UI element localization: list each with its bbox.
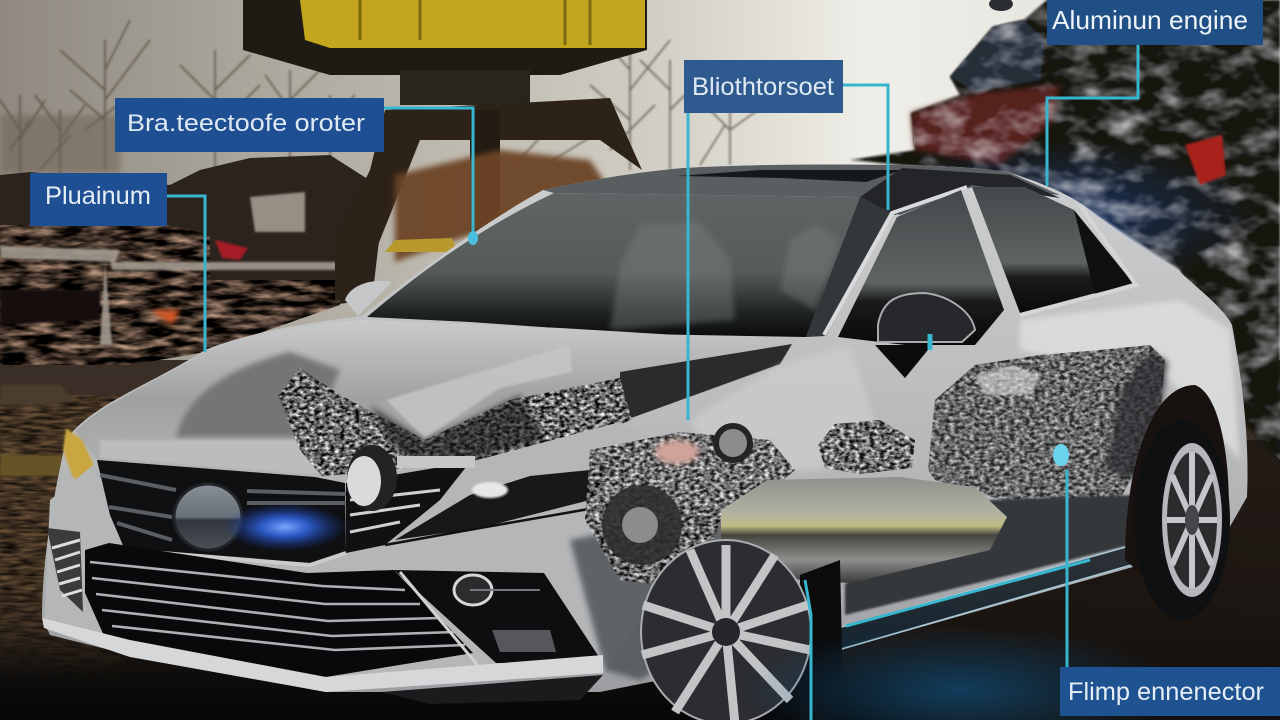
- car: rear window frame: [1020, 205, 1136, 315]
- car: upper grille: [97, 460, 346, 565]
- label: centre top: [684, 60, 843, 113]
- background: dense tree line: [0, 115, 120, 173]
- connector: under car: [805, 580, 811, 720]
- car: fog lamp recess: [394, 570, 603, 668]
- car: rear side window: [972, 187, 1133, 313]
- connector lines: [165, 45, 1138, 720]
- car: rear quarter glass: [1074, 210, 1133, 294]
- car: front side window: [838, 190, 1004, 345]
- background: dirt texture: [0, 395, 120, 665]
- car: lower grille: [85, 543, 473, 677]
- car: bumper lip highlights: [42, 618, 603, 692]
- background: dirt mound: [0, 385, 75, 406]
- car: round lens: [347, 445, 397, 511]
- car: sill: [838, 545, 1138, 650]
- car: exposed centre ghost parts: [585, 432, 795, 590]
- connector: top-left label: [384, 108, 473, 236]
- background: scrap pile right: [850, 0, 1280, 460]
- car: exposed engine at hood: [278, 368, 632, 510]
- car: exposed engine: [928, 345, 1168, 505]
- background: scrap heap left: [0, 155, 385, 365]
- label: bottom right: Flimp ennenector: [1068, 678, 1264, 706]
- label: aluminum engine: Aluminun engine: [1052, 5, 1248, 35]
- car: front wheel: [641, 540, 811, 720]
- car: lower-right bumper shade: [570, 510, 740, 680]
- label: centre top: Bliothtorsoet: [692, 73, 834, 101]
- car: dark hood wedge: [620, 344, 792, 422]
- connector dot: windshield: [468, 231, 478, 245]
- car: hood engine shadow: [370, 395, 545, 470]
- car: front corner vent: [47, 528, 83, 612]
- connector: centre label left: [686, 113, 690, 420]
- car: grille right stripes: [346, 462, 475, 553]
- connector: bottom right label: [1066, 470, 1068, 668]
- car: body: [42, 164, 1248, 692]
- label: platinum: [30, 173, 167, 226]
- car: red glow: [655, 440, 699, 464]
- label: bottom right: [1060, 667, 1280, 716]
- ground reflection tint: [740, 625, 1180, 720]
- background: yellow crane cab and tower: [243, 0, 647, 300]
- car: blue light glow: [223, 503, 347, 551]
- connector dot: engine: [1053, 444, 1069, 466]
- label: top left: Bra.teectoofe oroter: [127, 110, 365, 137]
- car: fender highlights: [690, 345, 880, 470]
- car: hood pane: [386, 345, 572, 438]
- car: left wing mirror: [345, 281, 392, 316]
- background: ground: [0, 360, 1280, 720]
- car: roof dark rail: [860, 168, 1060, 215]
- connector: centre label right: [843, 85, 888, 210]
- label: top left: [115, 98, 384, 152]
- background: dirt bank: [0, 455, 65, 476]
- car: a-pillar: [806, 197, 892, 337]
- car: badge: [174, 484, 242, 550]
- car: lower bumper light body: [44, 422, 720, 692]
- car: small parts cluster: [818, 420, 915, 474]
- car: ghost wheel: [602, 485, 682, 565]
- car: door highlight: [1020, 300, 1240, 460]
- car: main headlight: [385, 468, 660, 545]
- car: ghost ring: [716, 426, 750, 460]
- background: darker ground right: [840, 440, 1280, 720]
- car: tyre behind front wheel: [800, 560, 842, 720]
- label: aluminum engine: [1047, 0, 1263, 45]
- label: platinum: Pluainum: [45, 182, 151, 210]
- car: [42, 164, 1248, 720]
- car: hood: [75, 320, 795, 477]
- car: front splitter: [382, 675, 603, 704]
- car: rear wheel arch: [1125, 385, 1229, 590]
- car: hood glass oval: [176, 352, 340, 437]
- car: headlight strip: [63, 428, 106, 503]
- car: a-pillar chrome: [824, 187, 967, 335]
- car: roof band: [543, 164, 1060, 215]
- car: catalytic converter cylinder: [721, 477, 1007, 583]
- car: windshield: [367, 193, 860, 337]
- connector: sill line: [846, 560, 1090, 626]
- connector: platinum: [165, 196, 205, 352]
- car: sunroof: [677, 170, 902, 182]
- connector: mirror stub: [928, 334, 932, 350]
- car: door lower dark panel: [845, 495, 1140, 615]
- connector: aluminum engine: [1047, 45, 1138, 186]
- background: overcast sky: [0, 0, 1280, 400]
- car: seats through windshield: [610, 222, 840, 330]
- car: rear wheel: [1134, 420, 1230, 620]
- car: wing mirror: [875, 293, 975, 378]
- background: bare trees: [0, 20, 765, 190]
- car: hood lower highlight: [100, 440, 320, 475]
